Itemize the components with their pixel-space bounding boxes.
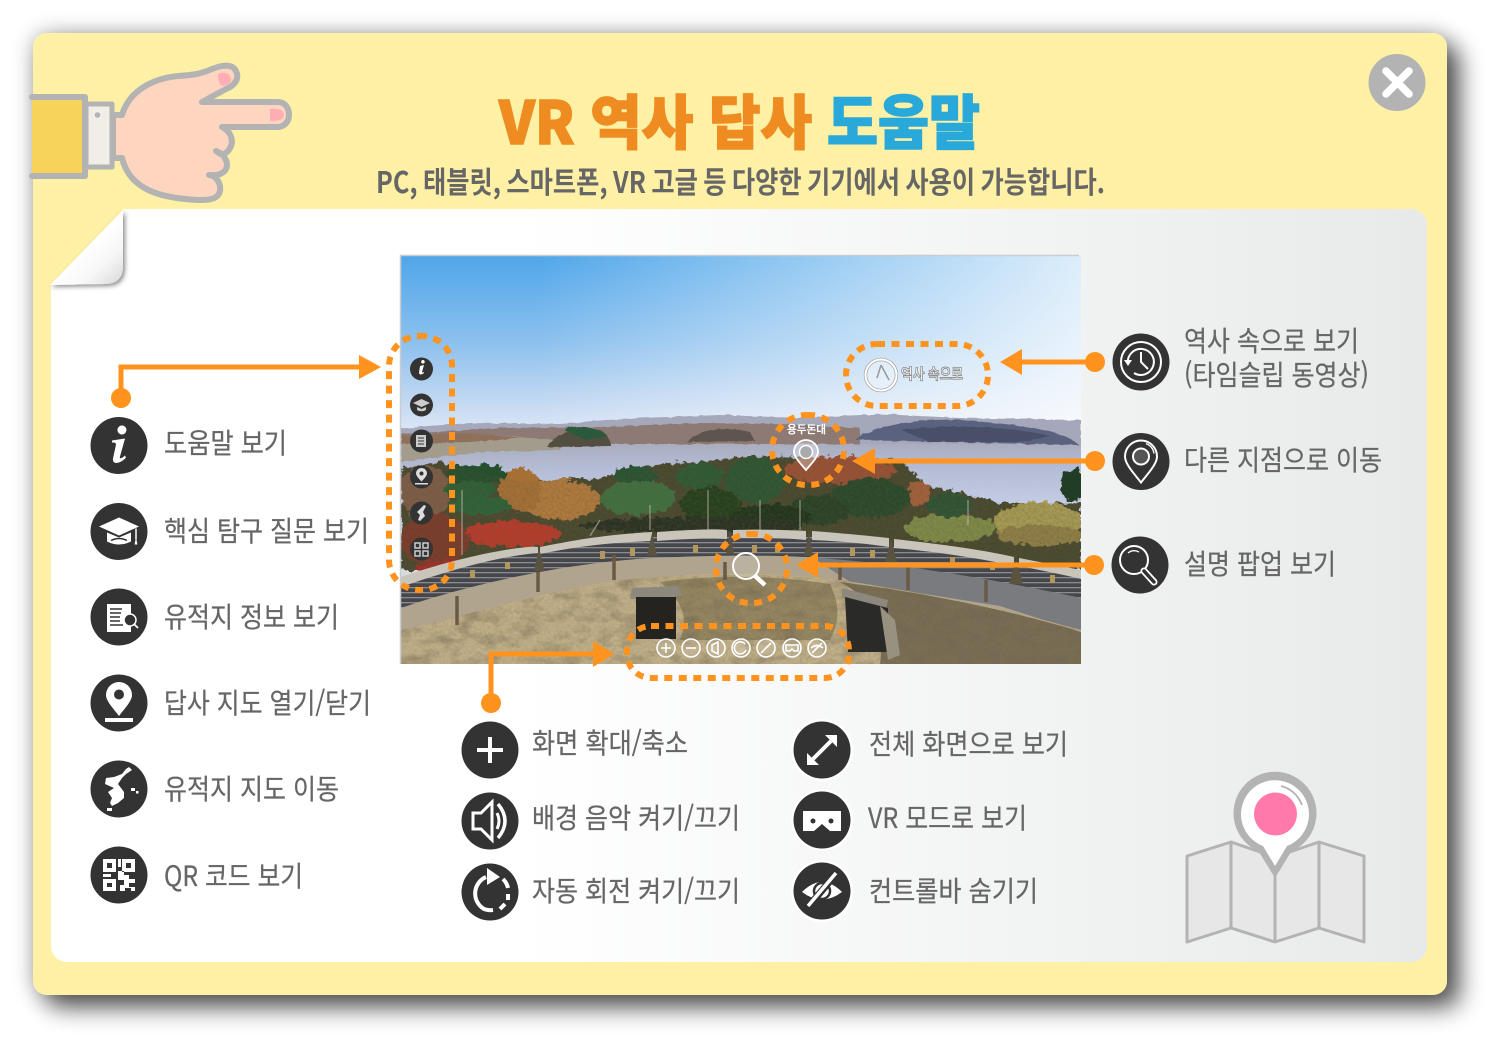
highlight: left toolbar	[389, 336, 452, 590]
item: QR: QR 코드 보기	[164, 855, 303, 895]
icon: VR goggles	[791, 789, 853, 851]
item: tour map: 답사 지도 열기/닫기	[164, 682, 371, 722]
history shortcut in photo: 역사 속으로	[901, 363, 963, 384]
item: site info: 유적지 정보 보기	[164, 596, 339, 636]
item: key question	[90, 503, 369, 560]
text: history label	[1184, 320, 1369, 394]
title: VR 역사 답사	[498, 76, 812, 161]
arrow: bottom controls	[481, 641, 614, 713]
icon: folded map with pin	[1187, 772, 1364, 942]
item: tour map	[90, 674, 371, 732]
item: QR	[90, 846, 303, 904]
icon: document search	[90, 588, 148, 646]
icon: QR code	[90, 846, 148, 904]
icon: graduation cap	[90, 503, 148, 560]
item: music	[462, 792, 740, 850]
item: history	[1112, 320, 1369, 394]
cuff	[86, 104, 112, 167]
item: key question: 핵심 탐구 질문 보기	[164, 510, 369, 550]
tree trunks	[462, 490, 968, 555]
item: help	[90, 417, 287, 474]
item: help: 도움말 보기	[164, 422, 287, 462]
item: fullscreen	[791, 719, 1068, 781]
left toolbar icons in photo	[410, 358, 433, 560]
fingernails	[218, 73, 231, 86]
subtitle: PC, 태블릿, 스마트폰, VR 고글 등 다양한 기기에서 사용이 가능합니다.	[376, 158, 1105, 202]
highlight: location pin	[772, 415, 844, 485]
location pin in photo: 용두돈대	[787, 421, 826, 437]
icon: clock history	[1112, 334, 1170, 390]
title: 도움말	[827, 76, 980, 161]
icon: Korea map	[90, 760, 148, 818]
icon: magnifier	[1112, 536, 1168, 594]
ground mound	[401, 555, 1081, 664]
close button	[1368, 54, 1426, 111]
dashed highlights	[389, 336, 988, 678]
sleeve	[32, 97, 85, 176]
history shortcut in photo	[866, 360, 963, 390]
text: history label: (타임슬립 동영상)	[1184, 354, 1369, 394]
icon: expand	[791, 719, 853, 781]
icon: map pin	[90, 674, 148, 732]
item: popup: 설명 팝업 보기	[1184, 543, 1336, 583]
bunker doors	[630, 586, 900, 660]
highlight: history button	[846, 344, 988, 406]
fortress wall	[401, 529, 1081, 640]
item: music: 배경 음악 켜기/끄기	[532, 797, 740, 837]
folded map	[1187, 842, 1364, 942]
item: zoom: 화면 확대/축소	[532, 722, 688, 762]
bottom controls in photo	[657, 639, 826, 657]
text: history label: 역사 속으로 보기	[1184, 320, 1359, 360]
item: move location: 다른 지점으로 이동	[1184, 439, 1382, 479]
item: VR mode	[791, 789, 1027, 851]
icon: rotation	[462, 864, 518, 920]
magnifier in photo	[733, 553, 765, 585]
item: move location	[1112, 433, 1382, 490]
foliage	[399, 456, 1086, 576]
arrow: history	[1000, 349, 1105, 375]
icon: location outline	[1112, 433, 1170, 490]
highlight: magnifier	[716, 534, 787, 603]
arrow: location	[852, 448, 1105, 474]
sky	[401, 256, 1081, 431]
item: site map	[90, 760, 339, 818]
foliage texture	[401, 455, 1081, 570]
folded page corner	[50, 210, 123, 285]
icon: hidden eye	[791, 860, 853, 922]
white content panel	[50, 209, 1427, 962]
arrow: magnifier	[796, 552, 1104, 578]
item: site info	[90, 588, 339, 646]
location pin in photo	[787, 421, 826, 470]
icon: plus	[462, 722, 518, 778]
title	[498, 76, 980, 161]
map pin	[1234, 772, 1316, 877]
hand	[113, 66, 289, 200]
item: rotate	[462, 864, 740, 920]
far hills and islands	[401, 414, 1081, 524]
highlight: bottom controls	[627, 626, 849, 678]
item: hide controls: 컨트롤바 숨기기	[869, 870, 1038, 910]
arrow: left toolbar	[111, 355, 381, 408]
item: popup	[1112, 536, 1336, 594]
photo frame edge	[400, 256, 1079, 664]
item: zoom	[462, 722, 688, 778]
icon: speaker	[462, 792, 518, 850]
item: rotate: 자동 회전 켜기/끄기	[532, 870, 740, 910]
item: VR mode: VR 모드로 보기	[868, 797, 1027, 837]
VR panorama screenshot	[399, 255, 1086, 664]
item: hide controls	[791, 860, 1038, 922]
item: fullscreen: 전체 화면으로 보기	[869, 723, 1068, 763]
icon: info	[90, 417, 148, 474]
icon: pointing hand	[32, 66, 289, 200]
item: site map: 유적지 지도 이동	[164, 768, 339, 808]
